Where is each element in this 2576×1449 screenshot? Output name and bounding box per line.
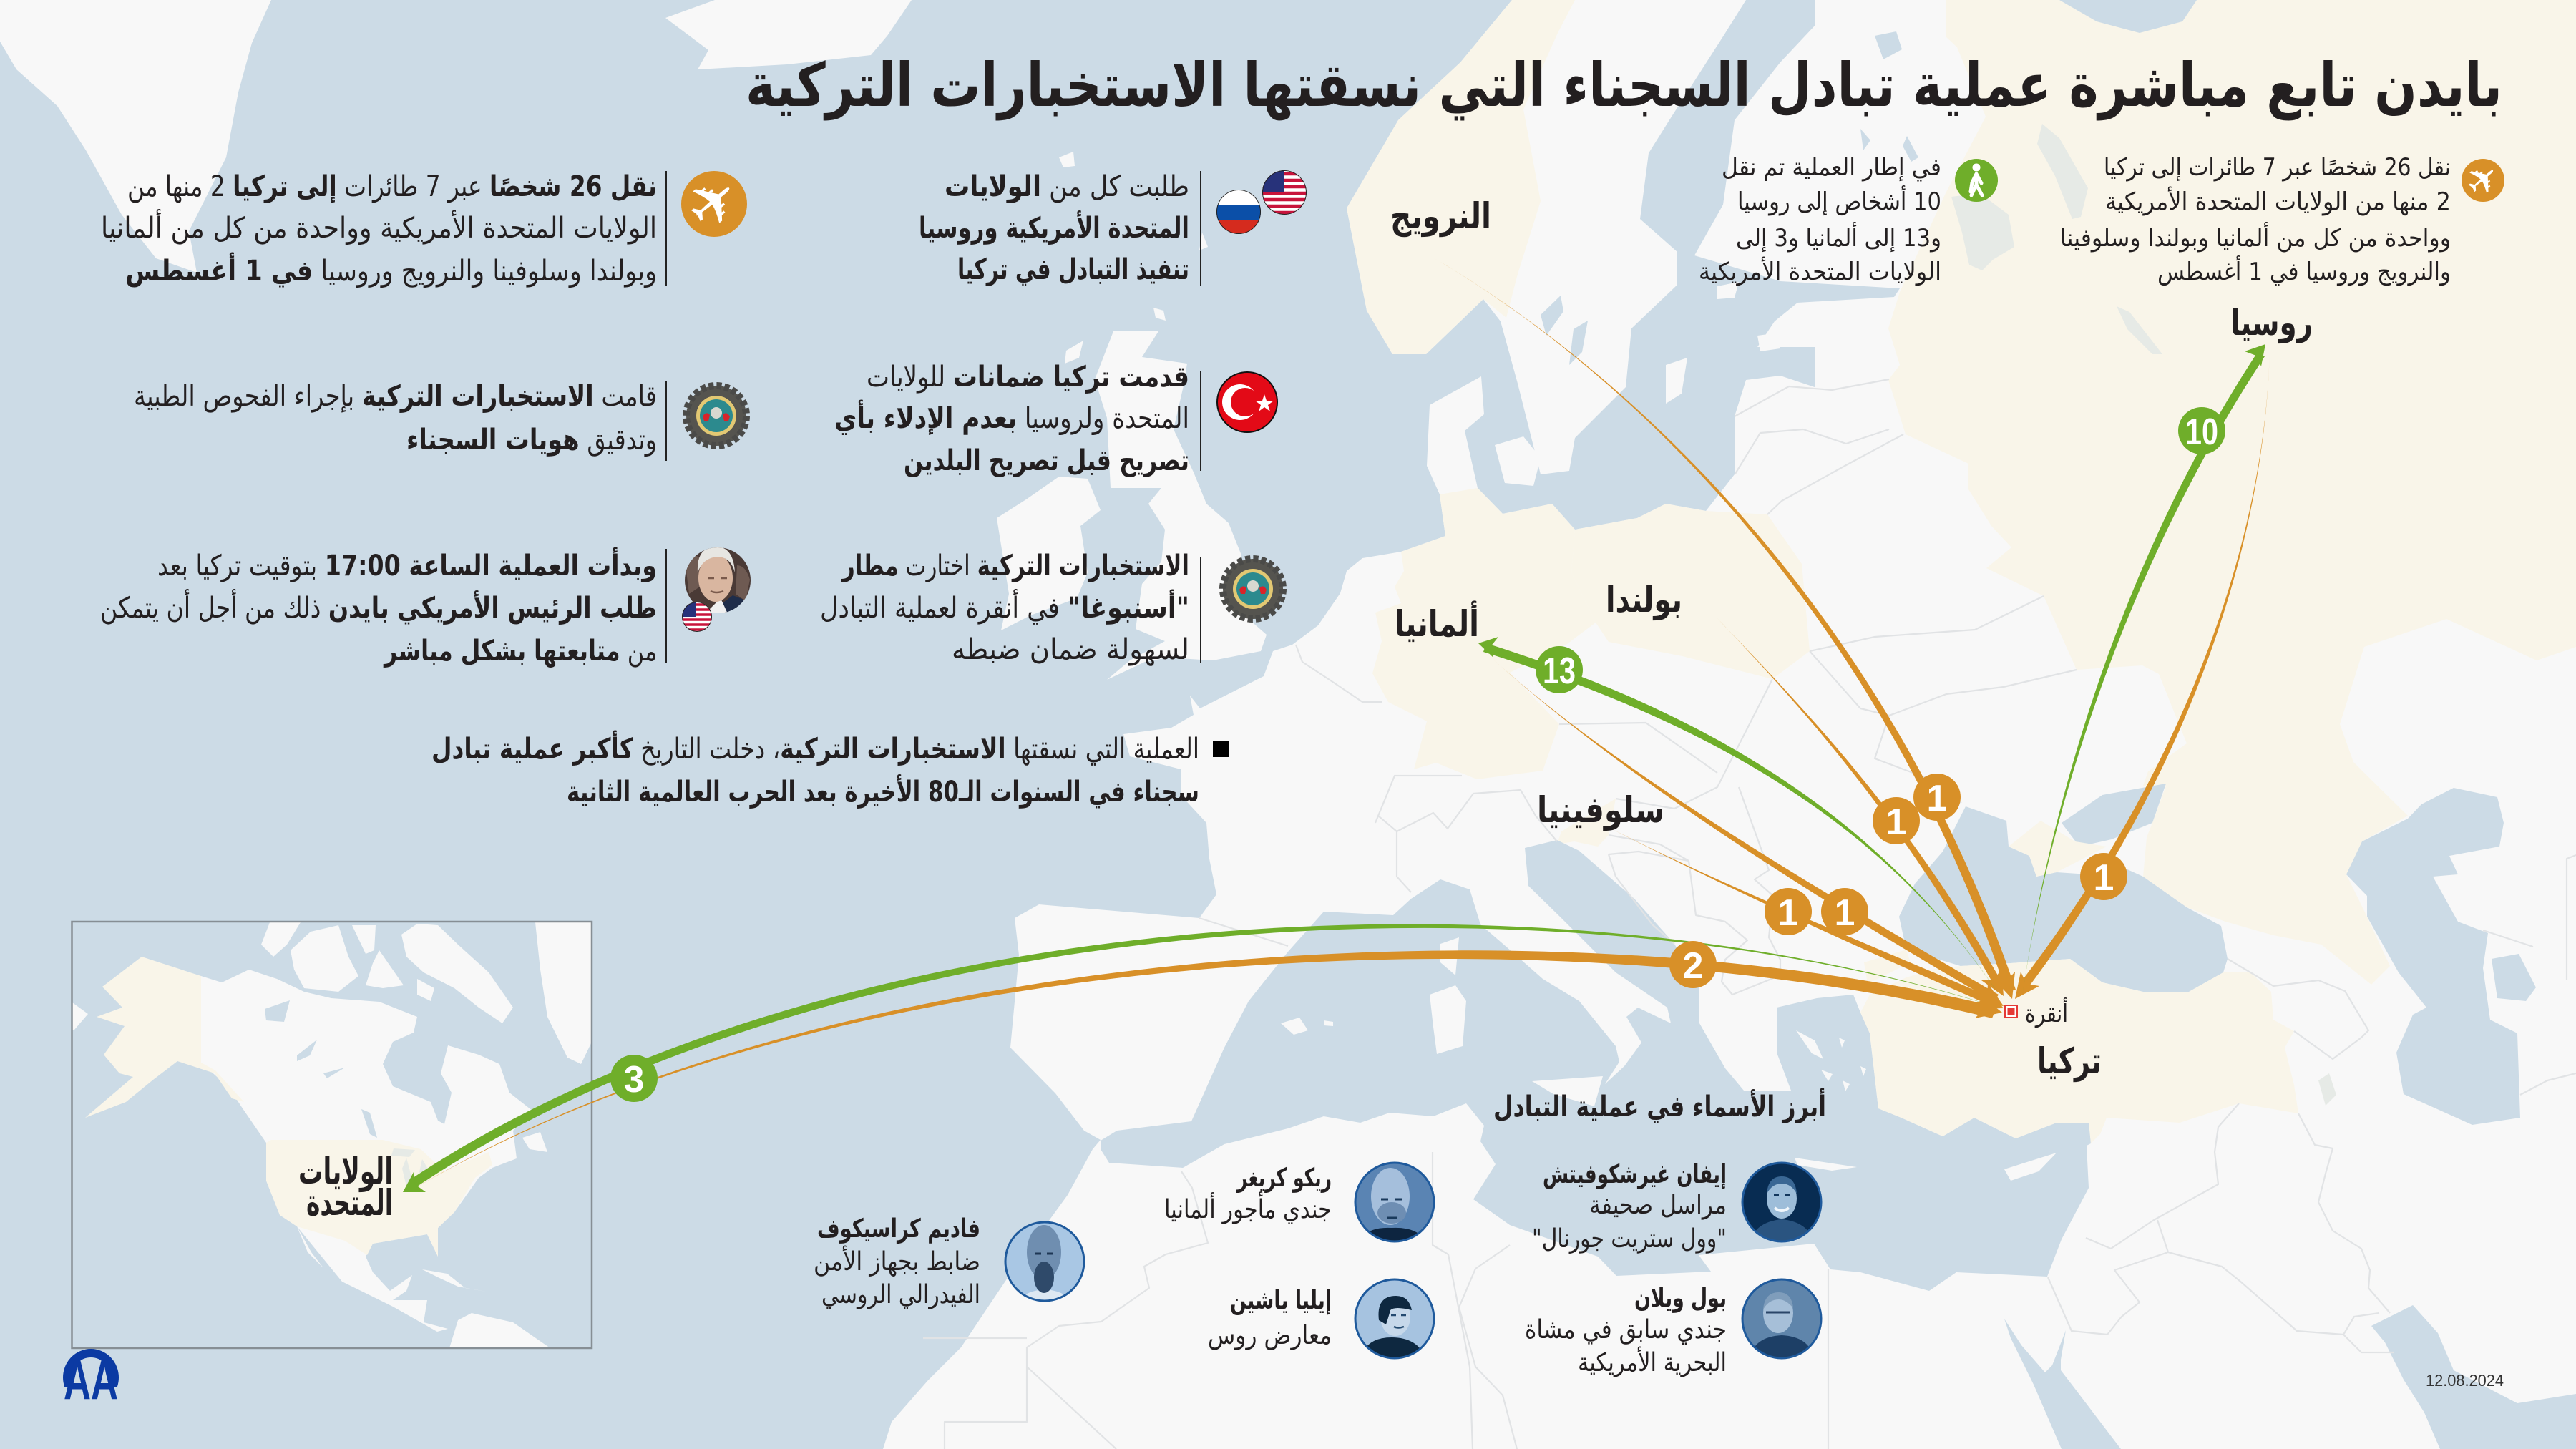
text: وتدقيق هويات السجناء bbox=[406, 424, 657, 457]
divider bbox=[665, 381, 667, 461]
text: "أسنبوغا" في أنقرة لعملية التبادل bbox=[820, 589, 1189, 625]
map: small north sea islands bbox=[1059, 152, 1208, 364]
map: continental mainland bbox=[883, 0, 2576, 1449]
map: Germany bbox=[1372, 488, 1596, 779]
text: transfers summary: في إطار العملية تم نقل bbox=[1722, 153, 1941, 182]
arrow: Russia to Ankara bbox=[2015, 348, 2270, 999]
text: "وول ستريت جورنال" bbox=[1532, 1224, 1727, 1254]
text: تصريح قبل تصريح البلدين bbox=[904, 444, 1189, 477]
text: ريكو كريغر bbox=[1236, 1163, 1332, 1193]
heading: notable names: أبرز الأسماء في عملية التبادل bbox=[1493, 1088, 1826, 1123]
arrow: Ankara to Russia (10 people) bbox=[2021, 344, 2265, 1002]
map: Russian lakes bbox=[1951, 124, 2336, 1106]
inset: Alaska bbox=[85, 957, 244, 1118]
text: إيليا ياشين bbox=[1230, 1286, 1332, 1315]
text: جندي مأجور ألمانيا bbox=[1164, 1191, 1332, 1224]
text: المتحدة الأمريكية وروسيا bbox=[919, 210, 1189, 245]
badge: 2 on USA arc bbox=[1669, 941, 1717, 988]
icon: intelligence seal bbox=[686, 386, 746, 446]
person: Vadim Krasikov bbox=[814, 1214, 1088, 1309]
text: الولايات المتحدة الأمريكية وواحدة من كل من ألمانيا bbox=[101, 209, 657, 245]
text: سجناء في السنوات الـ80 الأخيرة بعد الحرب العالمية الثانية bbox=[567, 774, 1199, 809]
text bbox=[134, 380, 657, 457]
map: Balearic islands bbox=[1281, 1018, 1333, 1035]
icon: small US flag bbox=[682, 602, 712, 632]
map: Russia bbox=[1888, 0, 2576, 985]
text: مراسل صحيفة bbox=[1589, 1191, 1727, 1220]
text: وبدأت العملية الساعة 17:00 بتوقيت تركيا بعد bbox=[157, 547, 657, 582]
text bbox=[431, 730, 1199, 809]
badge: 2 on USA arc: 2 bbox=[1683, 945, 1703, 987]
inset: United States bbox=[266, 1140, 492, 1257]
date: 12.08.2024 bbox=[2426, 1371, 2504, 1390]
text bbox=[101, 170, 657, 288]
inset: Great Lakes bbox=[391, 1148, 431, 1186]
map: Danish and Baltic islands bbox=[1495, 282, 1780, 486]
person: Evan Gershkovich bbox=[1532, 1159, 1825, 1254]
country label: Poland: بولندا bbox=[1606, 579, 1682, 621]
label: Ankara: أنقرة bbox=[2025, 997, 2068, 1028]
arrow: Poland to Ankara bbox=[1717, 618, 2004, 996]
text: الاستخبارات التركية اختارت مطار bbox=[841, 550, 1189, 582]
logo: Anadolu Agency bbox=[63, 1349, 119, 1400]
divider bbox=[665, 549, 667, 663]
photo bbox=[1006, 1224, 1083, 1299]
text: لسهولة ضمان ضبطه bbox=[952, 633, 1189, 666]
badge: 1 Poland bbox=[1873, 797, 1920, 844]
divider bbox=[1200, 371, 1201, 471]
text: وبولندا وسلوفينا والنرويج وروسيا في 1 أغسطس bbox=[125, 252, 657, 288]
text: جندي سابق في مشاة bbox=[1525, 1315, 1727, 1345]
map: seas and lakes bbox=[1101, 0, 2576, 1449]
text bbox=[1532, 1160, 1727, 1254]
badge: 1 Slovenia bbox=[1765, 888, 1812, 935]
text: إيفان غيرشكوفيتش bbox=[1543, 1160, 1727, 1189]
text: flights summary bbox=[2060, 153, 2451, 286]
country label: United States: الولايات bbox=[298, 1151, 393, 1193]
item: 26 people flown bbox=[101, 160, 755, 288]
inset: Russia tip bbox=[72, 1002, 88, 1030]
map: borders bbox=[923, 379, 2576, 1449]
map: highlighted countries base bbox=[1347, 0, 2576, 985]
text: طلبت كل من الولايات bbox=[945, 170, 1189, 203]
map: Red Sea bbox=[2004, 1319, 2121, 1449]
map: Turkish Thrace bbox=[1864, 950, 1911, 984]
map: Crimea bbox=[2009, 821, 2107, 877]
arrow: USA to Ankara (2 people) bbox=[411, 950, 2002, 1191]
badge: 3 on USA arc bbox=[610, 1055, 658, 1102]
inset: Baja California bbox=[297, 1226, 323, 1268]
inset: Canadian lakes bbox=[265, 1000, 377, 1138]
icon: intelligence seal bbox=[1223, 559, 1283, 619]
inset: North America map bbox=[72, 922, 592, 1348]
badge: 1 Slovenia: 1 bbox=[1778, 892, 1798, 934]
badge: 1 Russia bbox=[2080, 853, 2127, 900]
map: Persian Gulf bbox=[2371, 1305, 2576, 1449]
text: ضابط بجهاز الأمن bbox=[814, 1245, 980, 1277]
bullet bbox=[1213, 741, 1229, 757]
marker: Ankara bbox=[2005, 1005, 2017, 1018]
item: medical checks bbox=[134, 380, 746, 461]
text bbox=[1208, 1286, 1332, 1350]
icon: US flag bbox=[1262, 170, 1307, 215]
badge: 3 on USA arc: 3 bbox=[624, 1059, 644, 1101]
country label: Germany: ألمانيا bbox=[1395, 600, 1479, 645]
text: البحرية الأمريكية bbox=[1578, 1346, 1727, 1377]
map: Scandinavia bbox=[1347, 0, 1746, 474]
map: Turkey bbox=[1860, 959, 2298, 1143]
map: Finnish lakes bbox=[1860, 31, 1918, 162]
text: flights summary: وواحدة من كل من ألمانيا وبولندا وسلوفينا bbox=[2060, 222, 2451, 253]
icon: plane: ✈ bbox=[671, 160, 755, 246]
map: Mediterranean sea bbox=[1101, 840, 2091, 1291]
arrow: Germany to Ankara bbox=[1492, 658, 2004, 1006]
callout: largest exchange bbox=[431, 730, 1229, 809]
map: Slovenia bbox=[1557, 799, 1616, 847]
arrow: Norway to Ankara bbox=[1423, 252, 2016, 999]
text: الفيدرالي الروسي bbox=[821, 1280, 980, 1309]
text: بول ويلان bbox=[1634, 1284, 1727, 1313]
photo bbox=[1743, 1163, 1820, 1241]
logo: Anadolu Agency: AA bbox=[64, 1348, 118, 1411]
text: transfers summary bbox=[1699, 153, 1941, 286]
text: العملية التي نسقتها الاستخبارات التركية، دخلت التاريخ كأكبر عملية تبادل bbox=[431, 730, 1199, 766]
item: Biden start bbox=[100, 544, 758, 668]
map: Ireland bbox=[997, 477, 1101, 630]
map: Caspian Sea bbox=[2346, 788, 2520, 1125]
text: transfers summary: 10 أشخاص إلى روسيا bbox=[1737, 185, 1941, 216]
text: flights summary: 2 منها من الولايات المتحدة الأمريكية bbox=[2105, 186, 2451, 216]
person: Ilya Yashin bbox=[1208, 1277, 1438, 1363]
item: US and Russia request bbox=[919, 170, 1307, 286]
map: Great Britain bbox=[1095, 331, 1267, 680]
photo bbox=[1357, 1281, 1433, 1357]
text bbox=[100, 547, 657, 668]
text bbox=[834, 361, 1189, 477]
text: طلب الرئيس الأمريكي بايدن ذلك من أجل أن يتمكن bbox=[100, 589, 657, 625]
text bbox=[1525, 1284, 1727, 1377]
map: Black Sea bbox=[1899, 806, 2228, 992]
text: قامت الاستخبارات التركية بإجراء الفحوص الطبية bbox=[134, 380, 657, 413]
inset: Cuba bbox=[422, 1269, 487, 1292]
text: فاديم كراسيكوف bbox=[817, 1214, 980, 1244]
text bbox=[919, 170, 1189, 286]
arrow: Ankara to USA (3 people) bbox=[403, 924, 2007, 1192]
inset: Arctic islands bbox=[261, 922, 513, 1023]
stat block: flights bbox=[2060, 152, 2509, 286]
map: Sardinia bbox=[1430, 985, 1466, 1054]
text: نقل 26 شخصًا عبر 7 طائرات إلى تركيا 2 منها من bbox=[127, 170, 657, 203]
person: Paul Whelan bbox=[1525, 1277, 1825, 1377]
text bbox=[814, 1214, 980, 1309]
map: Kara Bogaz bbox=[2492, 954, 2536, 1001]
text: معارض روس bbox=[1208, 1321, 1332, 1350]
country label: Turkey: تركيا bbox=[2037, 1040, 2102, 1083]
stat block: transfers bbox=[1699, 153, 1998, 286]
text: قدمت تركيا ضمانات للولايات bbox=[867, 361, 1189, 394]
map: Poland bbox=[1571, 504, 1810, 679]
text: flights summary: والنرويج وروسيا في 1 أغسطس bbox=[2157, 255, 2451, 286]
badge: 10 Russia: 10 bbox=[2185, 411, 2218, 453]
inset: frame bbox=[72, 922, 592, 1348]
map: White Sea bbox=[2059, 0, 2197, 33]
inset: Greenland bbox=[535, 922, 592, 1064]
item: airport selection bbox=[820, 550, 1283, 666]
badge: 13 Germany: 13 bbox=[1543, 650, 1576, 692]
icon: Turkey flag bbox=[1217, 372, 1277, 432]
map: Greenland bbox=[0, 0, 271, 273]
map: Turkey and Crimea bbox=[1281, 821, 2298, 1181]
inset: Canada and central America bbox=[201, 970, 533, 1332]
country label: Norway: النرويج bbox=[1390, 195, 1491, 238]
badge: 1 Germany bbox=[1821, 888, 1868, 935]
divider bbox=[1200, 557, 1201, 663]
map: Sea of Azov bbox=[2062, 784, 2166, 847]
inset: Newfoundland bbox=[522, 1132, 547, 1152]
photo bbox=[1357, 1163, 1433, 1241]
item: Turkey guarantees bbox=[834, 361, 1277, 477]
icon: walking person bbox=[1955, 159, 1998, 202]
icon: plane orange small: ✈ bbox=[2456, 152, 2509, 208]
text: transfers summary: الولايات المتحدة الأمريكية bbox=[1699, 256, 1941, 286]
arrow: Ankara to Germany (13 people) bbox=[1478, 637, 2009, 1010]
map: Cyprus bbox=[2004, 1153, 2057, 1181]
divider bbox=[1200, 171, 1201, 286]
inset: South America bbox=[449, 1313, 550, 1348]
text bbox=[1164, 1163, 1332, 1224]
map: Corsica bbox=[1440, 937, 1459, 975]
badge: 1 Russia: 1 bbox=[2094, 857, 2114, 899]
map: Norway bbox=[1347, 0, 1575, 354]
badge: 1 Germany: 1 bbox=[1835, 892, 1855, 934]
text: المتحدة ولروسيا بعدم الإدلاء بأي bbox=[834, 399, 1189, 435]
arrow: Slovenia to Ankara bbox=[1603, 824, 2004, 1009]
badge: 1 Poland: 1 bbox=[1886, 801, 1906, 843]
map: Crete bbox=[1795, 1158, 1857, 1171]
country label: United States bbox=[298, 1151, 393, 1224]
map: Swedish lakes bbox=[1541, 296, 1588, 365]
map: Iceland bbox=[665, 0, 912, 69]
photo bbox=[1743, 1281, 1820, 1357]
person: Rico Krieger bbox=[1164, 1159, 1438, 1245]
text: تنفيذ التبادل في تركيا bbox=[957, 253, 1189, 286]
text: flights summary: نقل 26 شخصًا عبر 7 طائرات إلى تركيا bbox=[2104, 153, 2451, 182]
badge: 1 Norway: 1 bbox=[1927, 778, 1947, 819]
text: من متابعتها بشكل مباشر bbox=[383, 635, 657, 668]
country label: Russia: روسيا bbox=[2230, 302, 2313, 344]
icon: Biden portrait bbox=[685, 547, 751, 613]
text bbox=[820, 550, 1189, 666]
country label: Slovenia: سلوفينيا bbox=[1537, 789, 1664, 831]
icon: Russia flag bbox=[1216, 190, 1261, 235]
country label: United States: المتحدة bbox=[306, 1182, 393, 1224]
divider bbox=[665, 171, 667, 286]
badge: 1 Norway bbox=[1913, 774, 1961, 821]
map: Aegean islands bbox=[1796, 1030, 1866, 1091]
map: Sicily bbox=[1532, 1076, 1603, 1106]
text: transfers summary: و13 إلى ألمانيا و3 إلى bbox=[1736, 222, 1941, 253]
